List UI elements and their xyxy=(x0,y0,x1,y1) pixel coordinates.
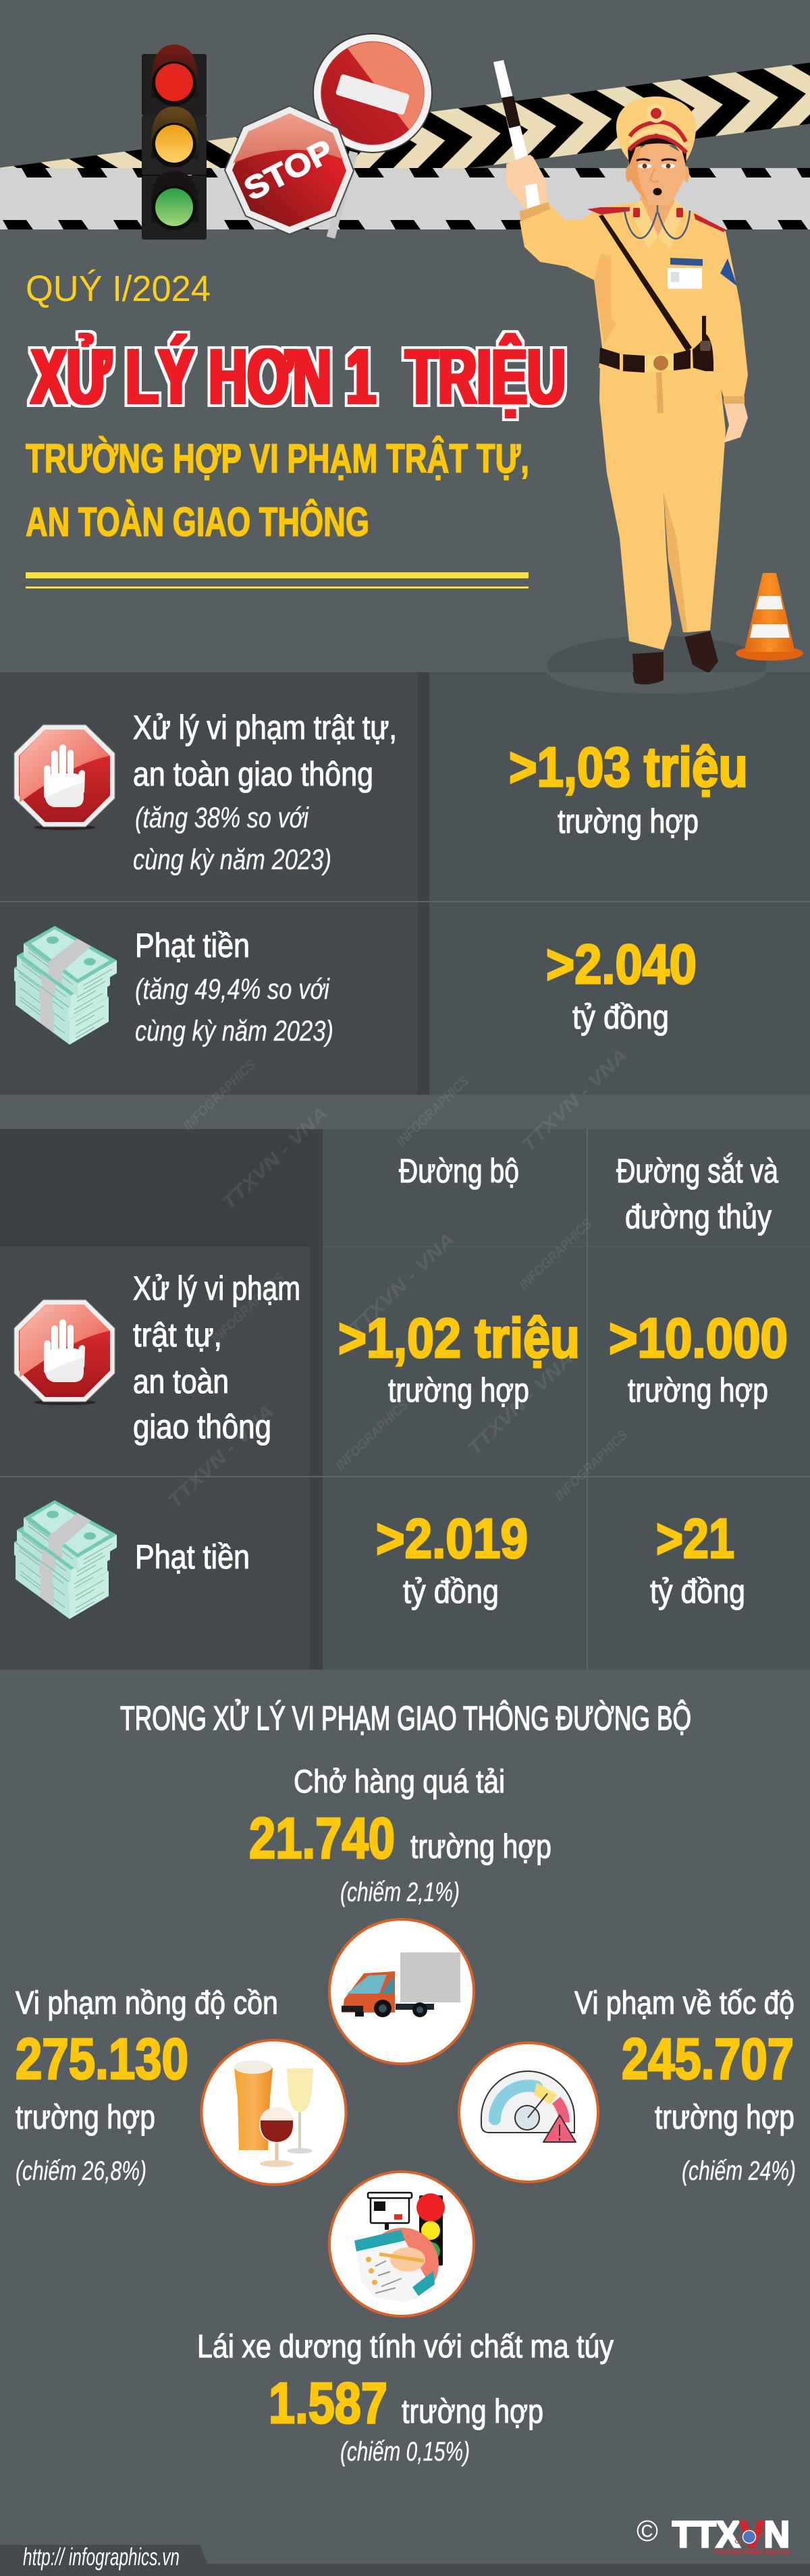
icon: checklist in circle xyxy=(329,2172,474,2316)
ears xyxy=(626,166,631,182)
text: violations handled: cùng kỳ năm 2023) xyxy=(133,844,331,876)
text: fines xyxy=(135,927,333,1047)
icon: stop hand xyxy=(14,725,115,830)
watermarks xyxy=(164,1045,632,1512)
row label: violations: giao thông xyxy=(133,1408,271,1446)
number: rail and water fines: tỷ đồng xyxy=(650,1572,745,1610)
watermarks: INFOGRAPHICS xyxy=(394,1073,473,1150)
watermarks: TTXVN - VNA xyxy=(464,1348,578,1459)
icon: stop sign: STOP xyxy=(238,132,339,207)
number: rail and water cases: trường hợp xyxy=(628,1371,768,1409)
cap crown xyxy=(616,97,696,161)
trousers xyxy=(599,364,726,650)
number: 2040 billion dong: tỷ đồng xyxy=(572,998,669,1036)
stat: overloaded cargo: Chở hàng quá tải xyxy=(294,1764,505,1800)
watermarks: INFOGRAPHICS xyxy=(209,1270,288,1347)
number: 1.03 million cases xyxy=(509,736,748,840)
logo: TTXVN copyright: © xyxy=(637,2515,658,2548)
yellow double rule xyxy=(26,572,529,588)
number: road fines xyxy=(376,1507,528,1610)
number: road cases xyxy=(338,1307,580,1409)
logo: TTXVN copyright: TTXVN xyxy=(672,2513,790,2555)
watermarks: INFOGRAPHICS xyxy=(552,1427,631,1504)
watermarks: TTXVN - VNA xyxy=(164,1401,278,1512)
radio xyxy=(693,316,713,371)
row label: violations: Xử lý vi phạm xyxy=(133,1269,300,1307)
icon: truck in circle xyxy=(329,1919,474,2064)
column heading: road: Đường bộ xyxy=(399,1152,519,1190)
illustration: road barrier tape xyxy=(0,46,810,246)
shoulder boards xyxy=(587,207,630,215)
number: road cases: trường hợp xyxy=(388,1371,529,1409)
row label: violations: an toàn xyxy=(133,1363,229,1400)
number: 1.03 million cases: trường hợp xyxy=(558,802,699,840)
heading: subtitle: AN TOÀN GIAO THÔNG xyxy=(26,499,369,545)
panel: breakdown table xyxy=(0,1129,810,1670)
stat: alcohol violations: Vi phạm nồng độ cồn xyxy=(16,1985,278,2021)
text: violations handled: (tăng 38% so với xyxy=(135,802,309,834)
shoulder strap xyxy=(599,215,692,352)
stat: alcohol violations xyxy=(16,1985,278,2186)
stat: speeding xyxy=(574,1985,796,2186)
eyes and brows xyxy=(638,163,651,169)
text: fines: cùng kỳ năm 2023) xyxy=(135,1015,333,1047)
stat: alcohol violations: (chiếm 26,8%) xyxy=(16,2156,146,2186)
number: road fines: >2.019 xyxy=(376,1507,528,1570)
number: rail and water fines: >21 xyxy=(656,1507,734,1570)
shoes xyxy=(632,652,664,684)
face xyxy=(628,138,686,206)
number: rail and water fines xyxy=(650,1507,745,1610)
logo: TTXVN copyright: Vietnam News Agency xyxy=(713,2546,791,2556)
stat: overloaded cargo xyxy=(249,1764,551,1907)
cap band xyxy=(630,122,686,142)
stat: drug positive drivers: (chiếm 0,15%) xyxy=(340,2437,470,2467)
footer bar with website: http:// infographics.vn xyxy=(23,2543,180,2571)
stat: overloaded cargo: 21.740 xyxy=(249,1807,395,1871)
stat: drug positive drivers: Lái xe dương tính với chất ma túy xyxy=(197,2329,614,2365)
column heading: rail and water xyxy=(616,1152,778,1236)
baton xyxy=(493,60,541,211)
number: 2040 billion dong xyxy=(546,933,697,1036)
text: fines: (tăng 49,4% so với xyxy=(135,973,330,1006)
number: road cases: >1,02 triệu xyxy=(338,1307,580,1369)
stat: alcohol violations: trường hợp xyxy=(16,2098,155,2136)
name tag and patch xyxy=(670,258,703,266)
row label: violations xyxy=(133,1269,300,1446)
heading: period: QUÝ I/2024 xyxy=(26,269,211,309)
illustration: traffic light xyxy=(142,45,207,240)
number: rail and water cases xyxy=(609,1307,788,1409)
illustration: traffic police officer xyxy=(493,60,767,694)
stat: overloaded cargo: (chiếm 2,1%) xyxy=(340,1878,460,1907)
heading: subtitle: TRƯỜNG HỢP VI PHẠM TRẬT TỰ, xyxy=(26,436,529,481)
watermarks: TTXVN - VNA xyxy=(518,1045,632,1155)
number: rail and water cases: >10.000 xyxy=(609,1307,788,1369)
icon: drinks in circle xyxy=(201,2040,346,2185)
row label: fines: Phạt tiền xyxy=(135,1538,250,1576)
raised hand xyxy=(506,155,548,213)
number: 1.03 million cases: >1,03 triệu xyxy=(509,736,748,798)
watermarks: INFOGRAPHICS xyxy=(516,1216,595,1293)
watermarks: INFOGRAPHICS xyxy=(180,1057,259,1134)
number: road fines: tỷ đồng xyxy=(403,1572,499,1610)
number: 2040 billion dong: >2.040 xyxy=(546,933,697,995)
panel: overall totals xyxy=(0,672,810,1095)
belt xyxy=(599,348,620,370)
lower hand xyxy=(724,402,748,443)
whistle cord xyxy=(624,196,690,239)
illustration: traffic cone xyxy=(736,573,803,661)
stat: overloaded cargo: trường hợp xyxy=(410,1828,551,1865)
icon: speedometer in circle xyxy=(459,2043,598,2182)
shoe and shadow overlap xyxy=(547,672,767,694)
icon: money stack xyxy=(14,926,117,1045)
text: violations handled xyxy=(133,709,397,876)
watermarks: INFOGRAPHICS xyxy=(333,1397,412,1474)
stat: alcohol violations: 275.130 xyxy=(16,2027,188,2091)
column heading: rail and water: đường thủy xyxy=(625,1198,772,1236)
text: violations handled: an toàn giao thông xyxy=(133,755,373,793)
text: fines: Phạt tiền xyxy=(135,927,250,964)
icon: no entry sign xyxy=(313,34,432,238)
icon: money stack xyxy=(14,1500,117,1619)
footer bar with website xyxy=(0,2543,810,2576)
whistle xyxy=(653,188,662,196)
watermarks: TTXVN - VNA xyxy=(345,1229,459,1340)
shirt and raised arm xyxy=(520,202,748,397)
icon: stop hand xyxy=(14,1300,115,1405)
stat: drug positive drivers: 1.587 xyxy=(269,2372,387,2436)
ground shadow xyxy=(547,636,767,694)
text: violations handled: Xử lý vi phạm trật tự, xyxy=(133,709,397,746)
heading: subtitle xyxy=(26,436,529,545)
hair xyxy=(628,134,686,165)
stat: drug positive drivers: trường hợp xyxy=(402,2392,543,2430)
row label: violations: trật tự, xyxy=(133,1316,222,1354)
icon: stop sign xyxy=(225,106,354,234)
neck and collar xyxy=(639,189,675,236)
heading: main title: XỬ LÝ HƠN 1 TRIỆU xyxy=(31,333,566,420)
watermarks: TTXVN - VNA xyxy=(218,1103,332,1213)
stat: drug positive drivers xyxy=(197,2329,614,2467)
